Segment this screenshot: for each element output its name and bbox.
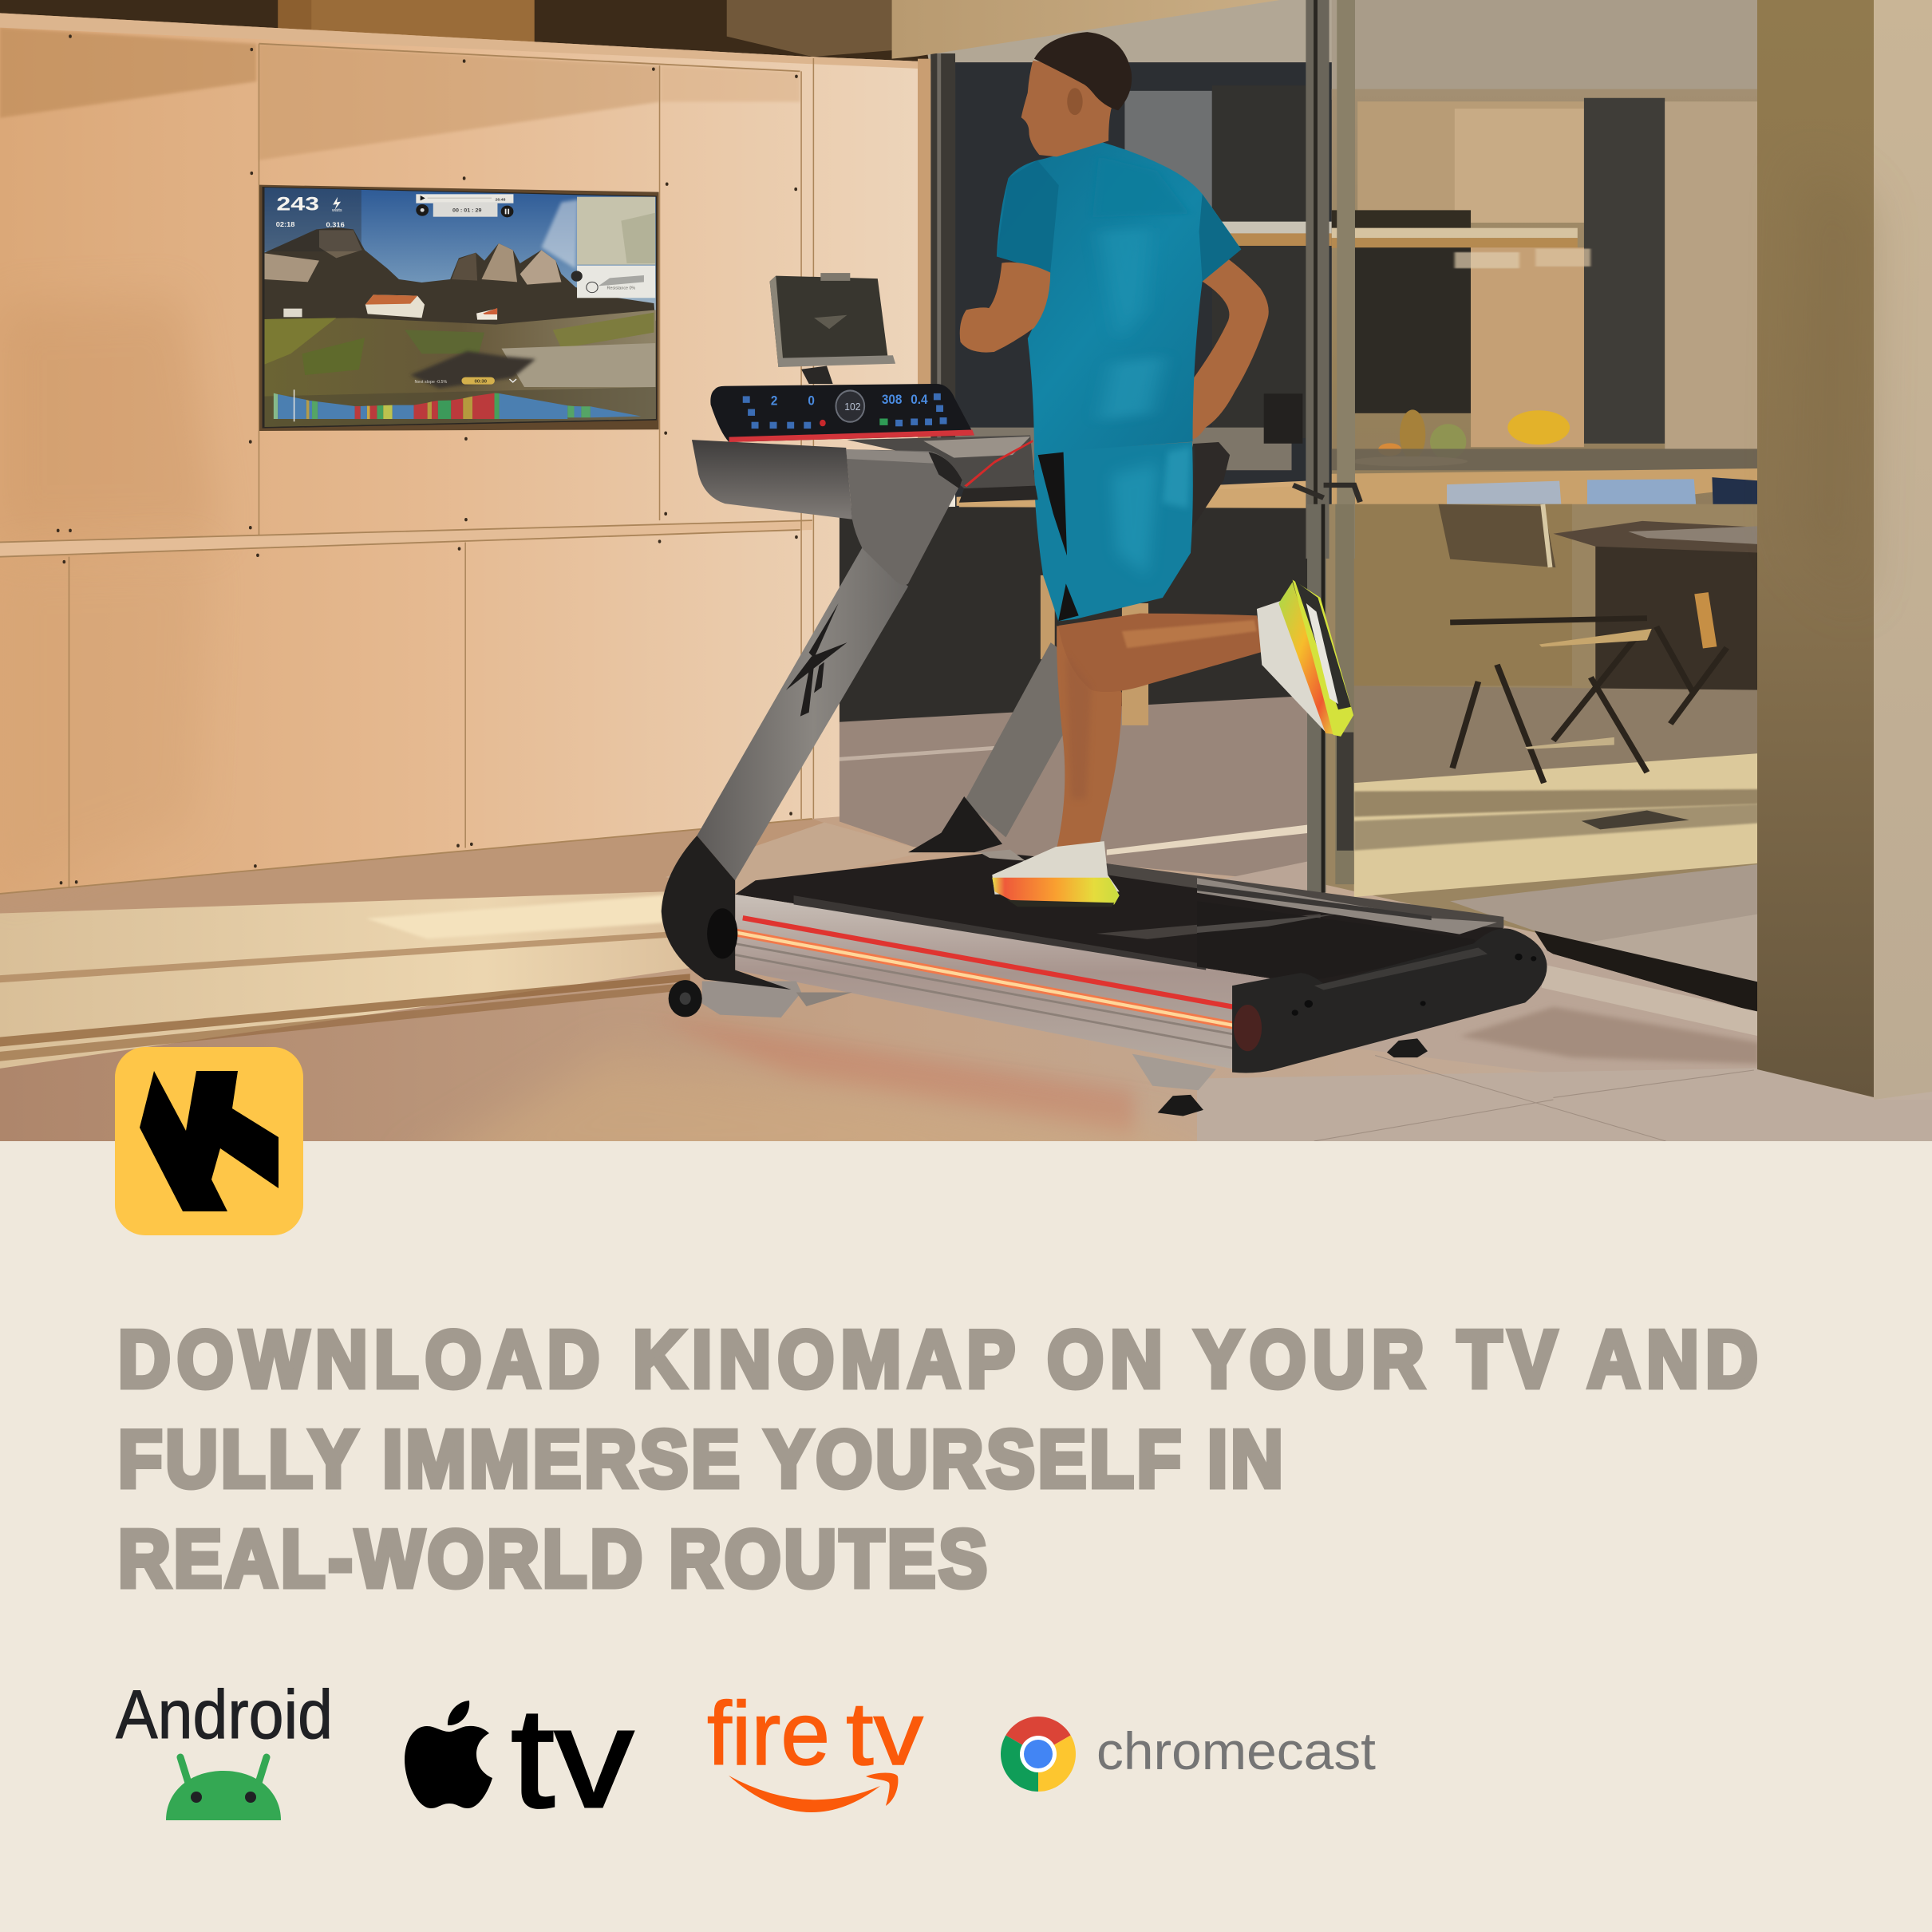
icon: smile arrow xyxy=(729,1773,898,1812)
treadmill tablet holder xyxy=(770,273,895,384)
TV overlay: map and resistance panels xyxy=(264,188,655,298)
treadmill front rail with red and orange light bars xyxy=(733,895,1270,1069)
runner legs xyxy=(1056,614,1266,853)
runner head xyxy=(1021,32,1132,156)
icon: treadmill logo mark xyxy=(786,603,847,717)
treadmill console display: 0 xyxy=(808,393,815,409)
treadmill frame column with logo xyxy=(662,547,908,990)
TV overlay: ride statistics: 243 xyxy=(276,193,319,215)
logo: Android: Android xyxy=(116,1677,333,1753)
glass door frame and handle xyxy=(1293,0,1360,893)
TV overlay: next slope indicator xyxy=(415,377,516,385)
logo: Chromecast: chromecast xyxy=(1096,1721,1376,1780)
treadmill console display: 102 xyxy=(844,400,861,413)
treadmill front stand and wheel xyxy=(669,980,1216,1116)
treadmill console display: 0.4 xyxy=(911,393,928,407)
interior lower cabinet and floor xyxy=(840,486,1310,897)
treadmill belt and far rail xyxy=(735,850,1503,995)
logo: Amazon Fire TV: tv xyxy=(846,1684,923,1784)
TV overlay: ride statistics: 02:18 xyxy=(276,220,294,228)
concrete column xyxy=(1757,0,1932,1100)
logo: Chromecast xyxy=(1001,1717,1376,1792)
heading xyxy=(118,1315,1758,1604)
TV overlay: next slope indicator: 00:30 xyxy=(475,379,488,384)
TV overlay: player controls xyxy=(416,194,513,217)
icon: Android robot head xyxy=(166,1757,281,1820)
runner front arm xyxy=(960,263,1050,353)
panel: hero photo of runner on treadmill xyxy=(0,0,1932,1179)
treadmill handle tray xyxy=(692,436,1038,585)
treadmill rear upright xyxy=(908,442,1230,852)
TV overlay: map and resistance panels: Resistance 0% xyxy=(607,286,636,290)
TV overlay: player controls: 26:48 xyxy=(496,198,506,203)
icon: Apple xyxy=(405,1701,492,1808)
TV overlay: elevation profile chart xyxy=(274,389,641,421)
TV overlay: ride statistics xyxy=(276,193,345,229)
ceiling beam xyxy=(892,0,1280,59)
runner xyxy=(960,32,1353,907)
treadmill console display xyxy=(710,384,974,442)
TV overlay: player controls: 00 : 01 : 29 xyxy=(452,208,482,214)
TV overlay: ride statistics: 0.316 xyxy=(326,221,345,229)
icon: Chrome xyxy=(1001,1717,1076,1792)
TV overlay: ride statistics: watts xyxy=(332,208,342,213)
logo: Amazon Fire TV: fire xyxy=(707,1684,830,1784)
floor xyxy=(0,816,1932,1141)
treadmill end cap and foot xyxy=(1197,878,1547,1073)
treadmill console display: 308 xyxy=(882,393,902,407)
wall panels xyxy=(0,13,931,894)
logo: Android xyxy=(116,1677,333,1820)
logo: Apple TV xyxy=(405,1678,634,1837)
interior room behind wall xyxy=(918,0,1332,507)
wall TV showing Kinomap route xyxy=(259,185,659,431)
runner shoe: raised xyxy=(1257,580,1353,737)
heading: REAL-WORLD ROUTES xyxy=(118,1515,987,1604)
heading: FULLY IMMERSE YOURSELF IN xyxy=(118,1415,1283,1504)
glass door reflections upper xyxy=(1331,0,1757,504)
TV overlay: next slope indicator: Next slope -0.5% xyxy=(415,380,448,385)
treadmill console display: 2 xyxy=(771,393,777,409)
logo: Apple TV: tv xyxy=(511,1678,634,1837)
logo: Amazon Fire TV xyxy=(707,1684,923,1812)
ceiling and top band xyxy=(0,0,958,65)
runner shirt xyxy=(997,140,1241,453)
runner shorts xyxy=(1034,442,1193,621)
heading: DOWNLOAD KINOMAP ON YOUR TV AND xyxy=(118,1315,1758,1405)
logo: Kinomap app icon xyxy=(115,1047,303,1235)
TV scene: mountains and ground xyxy=(264,188,656,427)
runner back arm xyxy=(1192,259,1269,439)
glass door reflections lower with chairs xyxy=(1197,504,1932,1141)
runner shoe: planted xyxy=(992,841,1120,907)
